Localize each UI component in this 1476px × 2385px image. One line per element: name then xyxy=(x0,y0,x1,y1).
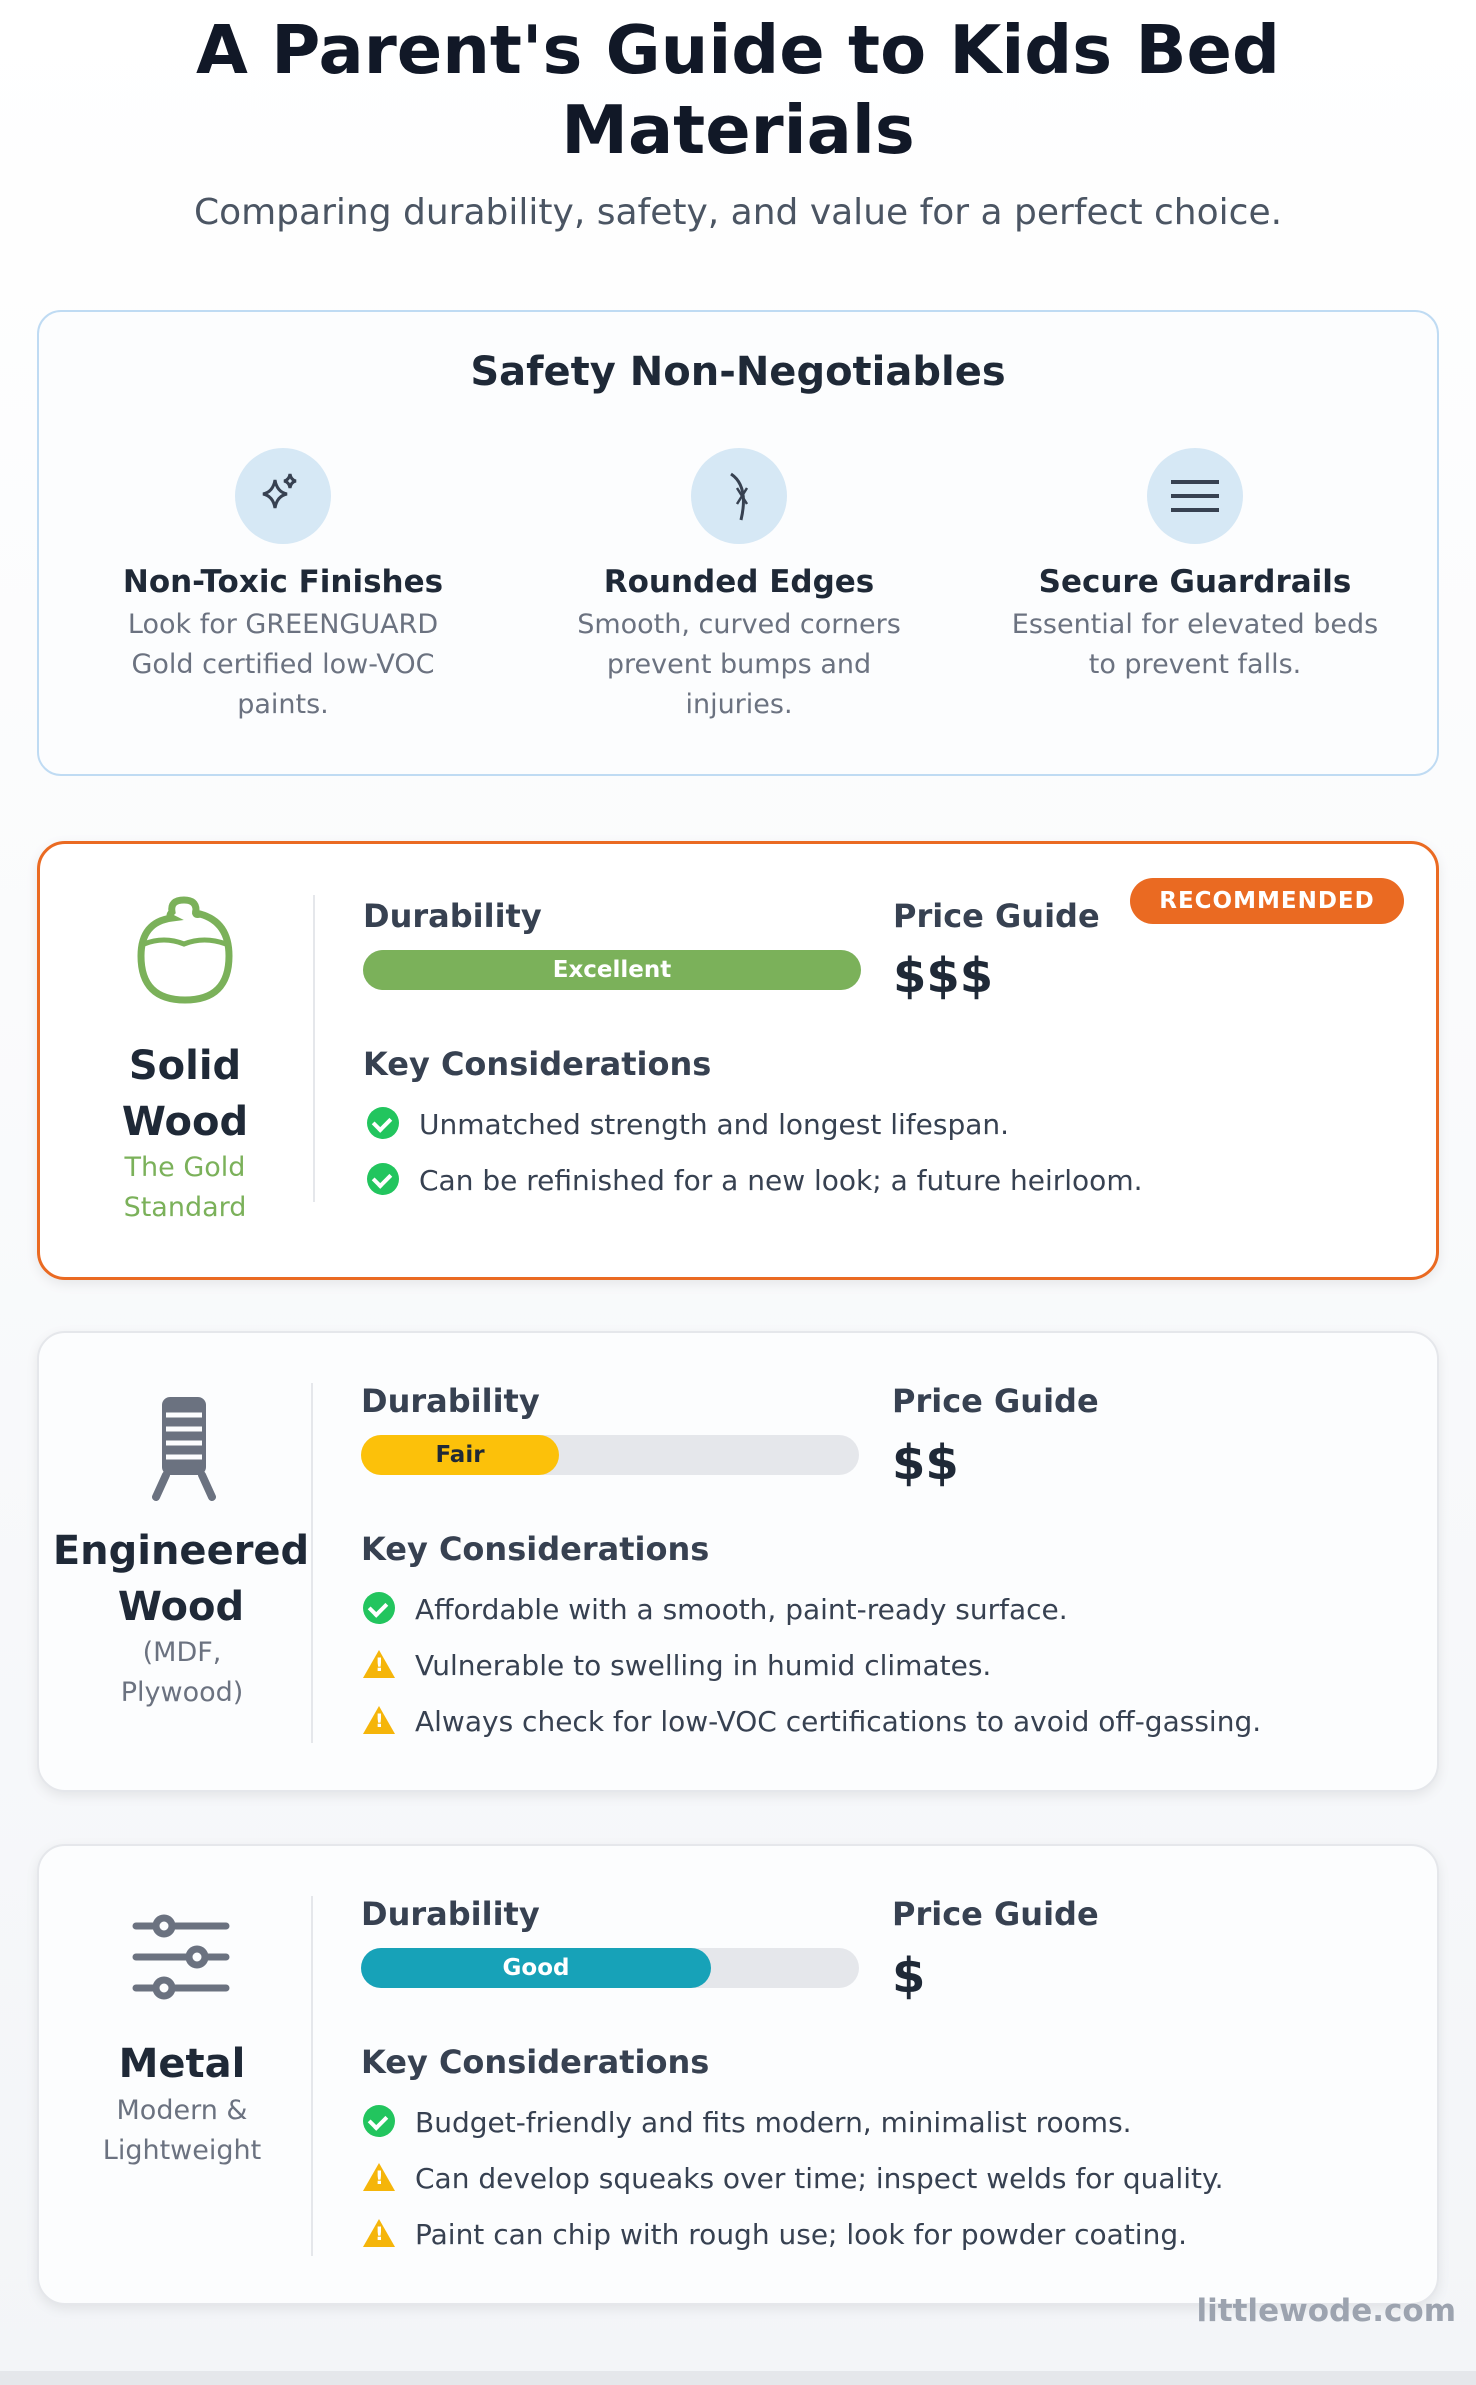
item: rounded: Smooth, curved corners xyxy=(577,609,901,640)
card: engineered wood: Always check for low-VOC certifications to avoid off-gassing. xyxy=(415,1705,1261,1738)
card: metal: Good xyxy=(503,1955,569,1981)
card: engineered wood: Wood xyxy=(118,1584,244,1630)
icon: lines xyxy=(1147,448,1243,544)
card: engineered wood: $$ xyxy=(892,1435,959,1491)
item: non-toxic: Non-Toxic Finishes xyxy=(123,564,443,600)
card: engineered wood: Affordable with a smooth, paint-ready surface. xyxy=(415,1593,1068,1626)
card: metal: Lightweight xyxy=(103,2135,261,2166)
name xyxy=(122,1043,248,1145)
safety heading: Safety Non-Negotiables xyxy=(470,349,1006,395)
card: solid wood xyxy=(37,841,1439,1280)
item: non-toxic: Look for GREENGUARD xyxy=(128,609,438,640)
name: Solid xyxy=(129,1043,241,1089)
durability: Durability xyxy=(363,897,542,935)
card: engineered wood: Plywood) xyxy=(121,1677,243,1708)
card: metal: Paint can chip with rough use; look for powder coating. xyxy=(415,2218,1187,2251)
card: engineered wood: Price Guide xyxy=(892,1382,1099,1420)
card: solid wood: $$$ xyxy=(893,948,993,1004)
title xyxy=(196,11,1280,169)
badge xyxy=(1130,878,1404,924)
card: metal: Budget-friendly and fits modern, minimalist rooms. xyxy=(415,2106,1132,2139)
item: non-toxic: Gold certified low-VOC xyxy=(131,649,434,680)
icon: sliders xyxy=(132,1914,230,2000)
card: solid wood: Excellent xyxy=(553,957,671,983)
item: non-toxic: paints. xyxy=(237,689,329,720)
key considerations: Key Considerations xyxy=(363,1045,711,1083)
item: guardrails: Secure Guardrails xyxy=(1039,564,1351,600)
icon: curve xyxy=(691,448,787,544)
card: engineered wood xyxy=(37,1331,1439,1792)
badge: RECOMMENDED xyxy=(1159,888,1375,914)
item: rounded: prevent bumps and xyxy=(607,649,871,680)
card: solid wood: The Gold xyxy=(125,1152,245,1183)
card: engineered wood: Fair xyxy=(435,1442,485,1468)
card: solid wood: Can be refinished for a new look; a future heirloom. xyxy=(419,1164,1142,1197)
item: rounded: Rounded Edges xyxy=(604,564,874,600)
item: non-toxic xyxy=(123,448,443,720)
card: engineered wood: Key Considerations xyxy=(361,1530,709,1568)
card: engineered wood: Engineered xyxy=(53,1528,309,1574)
icon: sparkle xyxy=(235,448,331,544)
icon: apple xyxy=(138,896,232,1004)
card: metal: Modern & xyxy=(117,2095,247,2126)
card: metal: Can develop squeaks over time; inspect welds for quality. xyxy=(415,2162,1224,2195)
card: metal: Metal xyxy=(119,2041,245,2087)
price: Price Guide xyxy=(893,897,1100,935)
card: metal: Durability xyxy=(361,1895,540,1933)
card: engineered wood: (MDF, xyxy=(143,1637,221,1668)
card: engineered wood: Vulnerable to swelling in humid climates. xyxy=(415,1649,991,1682)
item: guardrails xyxy=(1012,448,1378,680)
item: guardrails: Essential for elevated beds xyxy=(1012,609,1378,640)
title: Materials xyxy=(561,91,915,169)
item: rounded xyxy=(577,448,901,720)
watermark: littlewode.com xyxy=(1197,2293,1456,2329)
item: rounded: injuries. xyxy=(685,689,793,720)
card: metal: Key Considerations xyxy=(361,2043,709,2081)
title: A Parent's Guide to Kids Bed xyxy=(196,11,1280,89)
card: metal: Price Guide xyxy=(892,1895,1099,1933)
name: Wood xyxy=(122,1099,248,1145)
panel: safety xyxy=(37,310,1439,776)
card: engineered wood: Durability xyxy=(361,1382,540,1420)
card: metal: $ xyxy=(892,1948,925,2004)
card: solid wood: Unmatched strength and longest lifespan. xyxy=(419,1108,1009,1141)
card: solid wood: Standard xyxy=(124,1192,246,1223)
card: metal xyxy=(37,1844,1439,2305)
icon: ladder xyxy=(152,1397,216,1501)
item: guardrails: to prevent falls. xyxy=(1089,649,1301,680)
subtitle: Comparing durability, safety, and value for a perfect choice. xyxy=(194,192,1282,233)
